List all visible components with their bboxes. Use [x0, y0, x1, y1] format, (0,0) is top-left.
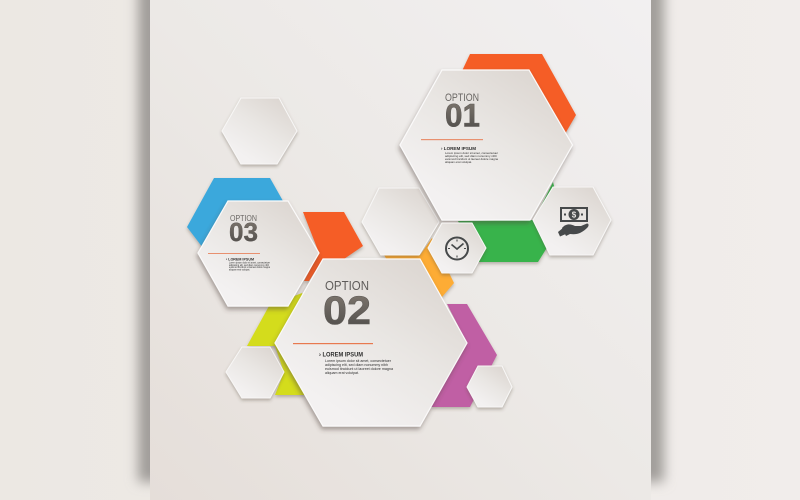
lime band behind option 02: [247, 293, 330, 395]
blank hexagon lower right: [467, 366, 512, 407]
number 03: 03: [229, 217, 258, 247]
text block 02: aliquam erat volutpat.: [325, 370, 359, 375]
heading: option 02: OPTION: [325, 279, 369, 293]
orange band behind option 03: [303, 212, 363, 281]
icon: clock: [446, 238, 468, 260]
purple band behind option 02: [431, 304, 497, 407]
number 02: 02: [323, 289, 371, 333]
text block 02: euismod tincidunt ut laoreet dolore magna: [325, 366, 394, 371]
panel: option 03: [198, 201, 319, 306]
text block 03: Lorem ipsum dolor sit amet, consectetuer: [229, 260, 270, 264]
text block 01: adipiscing elit, sed diam nonummy nibh: [445, 154, 497, 158]
blank hexagon lower left: [226, 347, 284, 398]
text block 02: adipiscing elit, sed diam nonummy nibh: [325, 362, 388, 367]
text block 03: aliquam erat volutpat.: [229, 267, 250, 271]
green band behind option 01: [458, 182, 555, 262]
text block 03: adipiscing elit, sed diam nonummy nibh: [229, 263, 269, 267]
heading: option 03: OPTION: [230, 213, 257, 223]
panel: option 02: [275, 259, 467, 426]
divider 03: [208, 253, 260, 254]
text block 02: [319, 352, 394, 375]
divider 02: [293, 343, 373, 344]
blue band behind option 03: [187, 178, 283, 248]
text block 03: euismod tincidunt ut laoreet dolore magna: [229, 265, 270, 269]
blank hexagon middle: [362, 188, 439, 255]
blank hexagon top left: [222, 98, 297, 164]
text block 02: › LOREM IPSUM: [319, 352, 363, 358]
text block 02: Lorem ipsum dolor sit amet, consectetuer: [325, 358, 392, 363]
text block 03: › LOREM IPSUM: [226, 258, 254, 262]
text block 01: › LOREM IPSUM: [441, 146, 476, 151]
text block 01: [441, 146, 498, 164]
panel: clock icon hexagon: [428, 223, 486, 273]
yellow band behind small hexagon: [384, 238, 454, 297]
text block 01: aliquam erat volutpat.: [445, 160, 472, 164]
number 01: 01: [445, 98, 480, 134]
orange band behind option 01: [462, 54, 576, 134]
divider 01: [421, 139, 483, 140]
text block 01: Lorem ipsum dolor sit amet, consectetuer: [445, 151, 498, 155]
text block 03: [226, 258, 270, 271]
panel: money icon hexagon: [533, 187, 611, 255]
text block 01: euismod tincidunt ut laoreet dolore magna: [445, 157, 498, 161]
panel: option 01: [400, 70, 572, 220]
icon: banknote and hand: $: [572, 210, 577, 219]
heading: option 01: OPTION: [445, 92, 479, 104]
